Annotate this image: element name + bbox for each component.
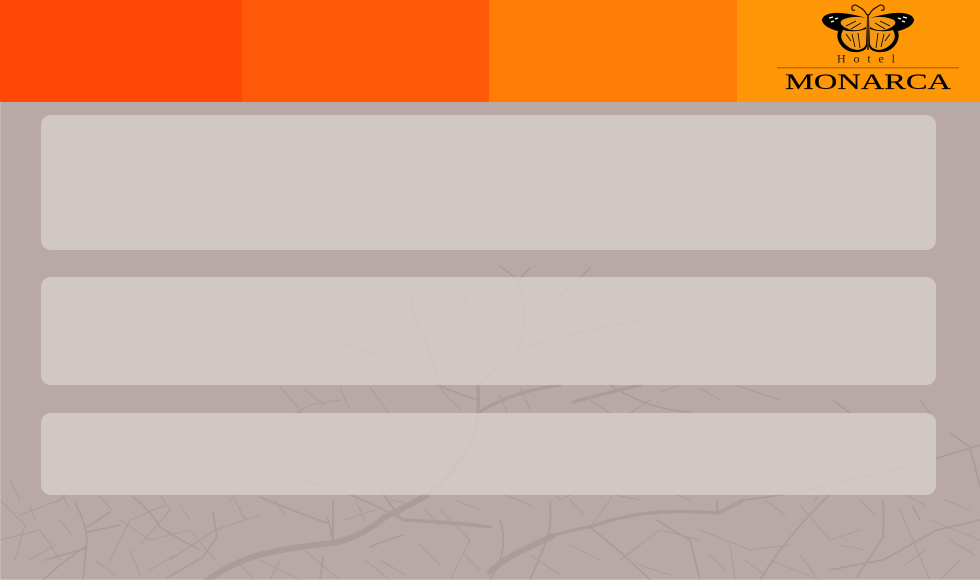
text: Hotel: Hotel <box>837 52 896 66</box>
page edge bottom <box>0 579 980 580</box>
page edge left <box>0 102 1 580</box>
panel: middle <box>41 277 936 385</box>
logo: Hotel Monarca <box>777 4 959 94</box>
header band 2 <box>242 0 489 102</box>
header band 1 <box>0 0 242 102</box>
panel: top <box>41 115 936 250</box>
header band 4 <box>737 0 980 102</box>
text: MONARCA: MONARCA <box>785 69 951 94</box>
icon: monarch butterfly <box>822 5 914 52</box>
divider line <box>777 67 959 68</box>
panel: bottom <box>41 413 936 495</box>
header band 3 <box>489 0 737 102</box>
